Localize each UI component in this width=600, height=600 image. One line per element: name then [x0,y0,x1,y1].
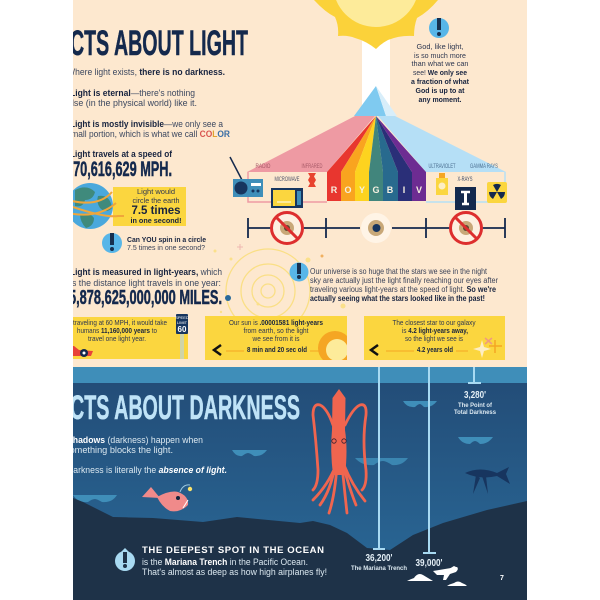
icon: speed sign [175,314,189,359]
icon: stars [473,338,502,358]
callout: circle the earth: circle the earth [132,196,180,205]
text block: light facts: else (in the physical world) like it. [67,98,197,108]
icon: speed sign: 60 [178,325,187,334]
callout: our sun: Our sun is .00001581 light-years [229,318,323,327]
callout: God like light: a fraction of what [411,77,469,86]
spectrum labels: MICROWAVE [274,177,300,183]
icon: eye arrow [214,345,221,355]
text block: light facts: small portion, which is what we call COLOR [67,129,230,139]
icon: sun [314,0,438,49]
illustration: orbits and stars [214,244,346,316]
text block: universe [310,267,498,303]
rainbow letters: O [344,185,352,195]
icon: microwave [271,188,303,208]
icon: radiation [487,182,507,203]
text block: light-years [70,267,222,288]
callout: traveling at 60 mph: travel one light year. [88,334,146,343]
depth marker: mariana trench [351,367,407,572]
callout: deepest spot in the ocean: THE DEEPEST SPOT IN THE OCEAN [142,545,324,556]
icon: eye arrow [371,345,378,355]
depth marker: total darkness: The Point of [458,403,493,409]
text block: darkness facts: Shadows (darkness) happen when [67,435,203,445]
icon: ultraviolet sunscreen [436,173,448,195]
callout: our sun: from earth, so the light [244,326,309,335]
icon: radio [230,157,263,197]
depth marker: total darkness [454,367,497,416]
icon: car [73,346,93,357]
text block: light facts [67,67,230,159]
text block: light-years: is the distance light travels in one year: [70,278,221,288]
icon: globe [73,183,124,229]
text: spin question: 7.5 times in one second? [127,243,205,252]
ocean floor [73,498,527,600]
callout: God like light: God is up to at [416,86,465,95]
callout: God like light [411,18,469,104]
callout: traveling at 60 mph [66,314,189,359]
callout: God like light: see! We only see [413,68,467,77]
icon: x-ray bone [455,187,476,210]
icon: exclamation [290,262,308,282]
prism [354,86,397,116]
callout: traveling at 60 mph: humans 11,160,000 years to [77,326,157,335]
icon: speed sign: LIMIT [177,320,188,325]
icon: infrared waves [308,173,316,187]
illustration: anglerfish [142,485,192,511]
depth marker: total darkness: Total Darkness [454,410,497,416]
callout: God like light: any moment. [418,95,462,104]
icon: visible eye [361,213,391,243]
text block: universe: Our universe is so huge that the stars we see in the night [310,267,488,276]
text: spin question: Can YOU spin in a circle [127,235,206,244]
text block: darkness facts [65,435,227,475]
title: facts about darkness: CTS ABOUT DARKNESS [70,389,300,427]
callout: closest star: so the light we see is [405,334,463,343]
illustration: deep sea fish [465,467,510,494]
spectrum labels: ULTRAVIOLET [428,164,456,170]
callout: our sun [205,316,347,360]
rainbow letters: R [331,185,338,195]
text: spin question [127,236,206,250]
pink invisible spectrum, left [247,116,375,202]
depth marker: mariana trench: 36,200' [366,553,392,564]
depth marker: mariana trench: The Mariana Trench [351,566,407,572]
timeline: what the eye can see [248,212,505,244]
icon: water drop exclamation [115,548,135,571]
panel: light background [73,0,527,367]
spectrum labels: INFRARED [302,164,323,170]
callout: God like light: is so much more [414,51,466,60]
panel: darkness ocean background [73,383,527,550]
text block: darkness facts: Darkness is literally the absence of light. [67,465,227,475]
text block: light facts: Light is mostly invisible—we only see a [70,119,223,129]
waves [73,401,493,502]
illustration: airplane and clouds [407,566,467,586]
text block: universe: actually seeing what the stars looked like in the past! [310,294,485,303]
icon: exclamation [102,233,122,253]
depth marker: airplanes: 39,000' [416,558,442,569]
chart: electromagnetic spectrum [230,116,507,210]
callout: circle the earth: in one second! [130,216,182,225]
text block: darkness facts: something blocks the light. [65,445,173,455]
spectrum labels: RADIO [256,164,271,170]
blue invisible spectrum, right [378,116,506,202]
big number: speed of light: 670,616,629 MPH. [66,158,172,181]
callout: circle the earth: 7.5 times [132,205,180,217]
big number: miles: 5,878,625,000,000 MILES. [69,287,222,309]
icon: crossed eye left [272,212,302,244]
callout: our sun: we see from it is [252,334,300,343]
callout: traveling at 60 mph: traveling at 60 MPH, it would take [73,318,167,327]
page number: 7 [500,575,504,582]
text block: universe: traveling various light-years at the speed of light. So we're [310,285,496,294]
text block: light-years: Light is measured in light-years, which [70,267,222,277]
spectrum labels: X-RAYS [458,177,472,183]
ocean surface band [73,367,527,383]
callout: closest star [364,316,505,360]
rainbow bands [327,116,426,201]
callout: closest star: The closest star to our galaxy [392,318,476,327]
callout: God like light: God, like light, [416,42,464,51]
callout: deepest spot in the ocean: is the Mariana Trench in the Pacific Ocean. [142,557,308,567]
callout: circle the earth: Light would [137,187,175,196]
text block: light facts: Where light exists, there is no darkness. [67,67,225,77]
depth marker: airplanes [416,367,442,569]
callout: deepest spot in the ocean: That's almost as deep as how high airplanes fly! [142,567,327,577]
rainbow letters: G [372,185,380,195]
icon: crossed eye right [450,212,482,244]
callout: closest star: 4.2 years old [417,345,453,354]
spectrum labels [256,164,498,183]
text block: light facts: Light travels at a speed of [70,149,173,159]
depth marker: total darkness: 3,280' [464,390,486,401]
rainbow letters: V [416,185,422,195]
light beam [362,36,390,116]
callout: deepest spot in the ocean [115,545,327,577]
illustration: giant squid [313,389,366,513]
rainbow letters [331,186,422,193]
callout: God like light: than what we can [412,59,468,68]
text block: universe: sky are actually just the light finally reaching our eyes after [310,276,498,285]
spectrum labels: GAMMA RAYS [470,164,498,170]
icon: orange sun [318,331,352,365]
text block: light facts: Light is eternal—there's nothing [70,88,195,98]
title: facts about light: CTS ABOUT LIGHT [70,24,248,63]
rainbow letters: Y [359,185,365,195]
icon: exclamation [429,18,449,38]
callout: our sun: 8 min and 20 sec old [247,345,307,354]
rainbow letters: I [403,185,405,195]
rainbow letters: B [387,185,394,195]
icon: speed sign: SPEED [175,315,189,320]
callout: circle the earth [67,183,186,229]
callout: closest star: is 4.2 light-years away, [402,326,468,335]
